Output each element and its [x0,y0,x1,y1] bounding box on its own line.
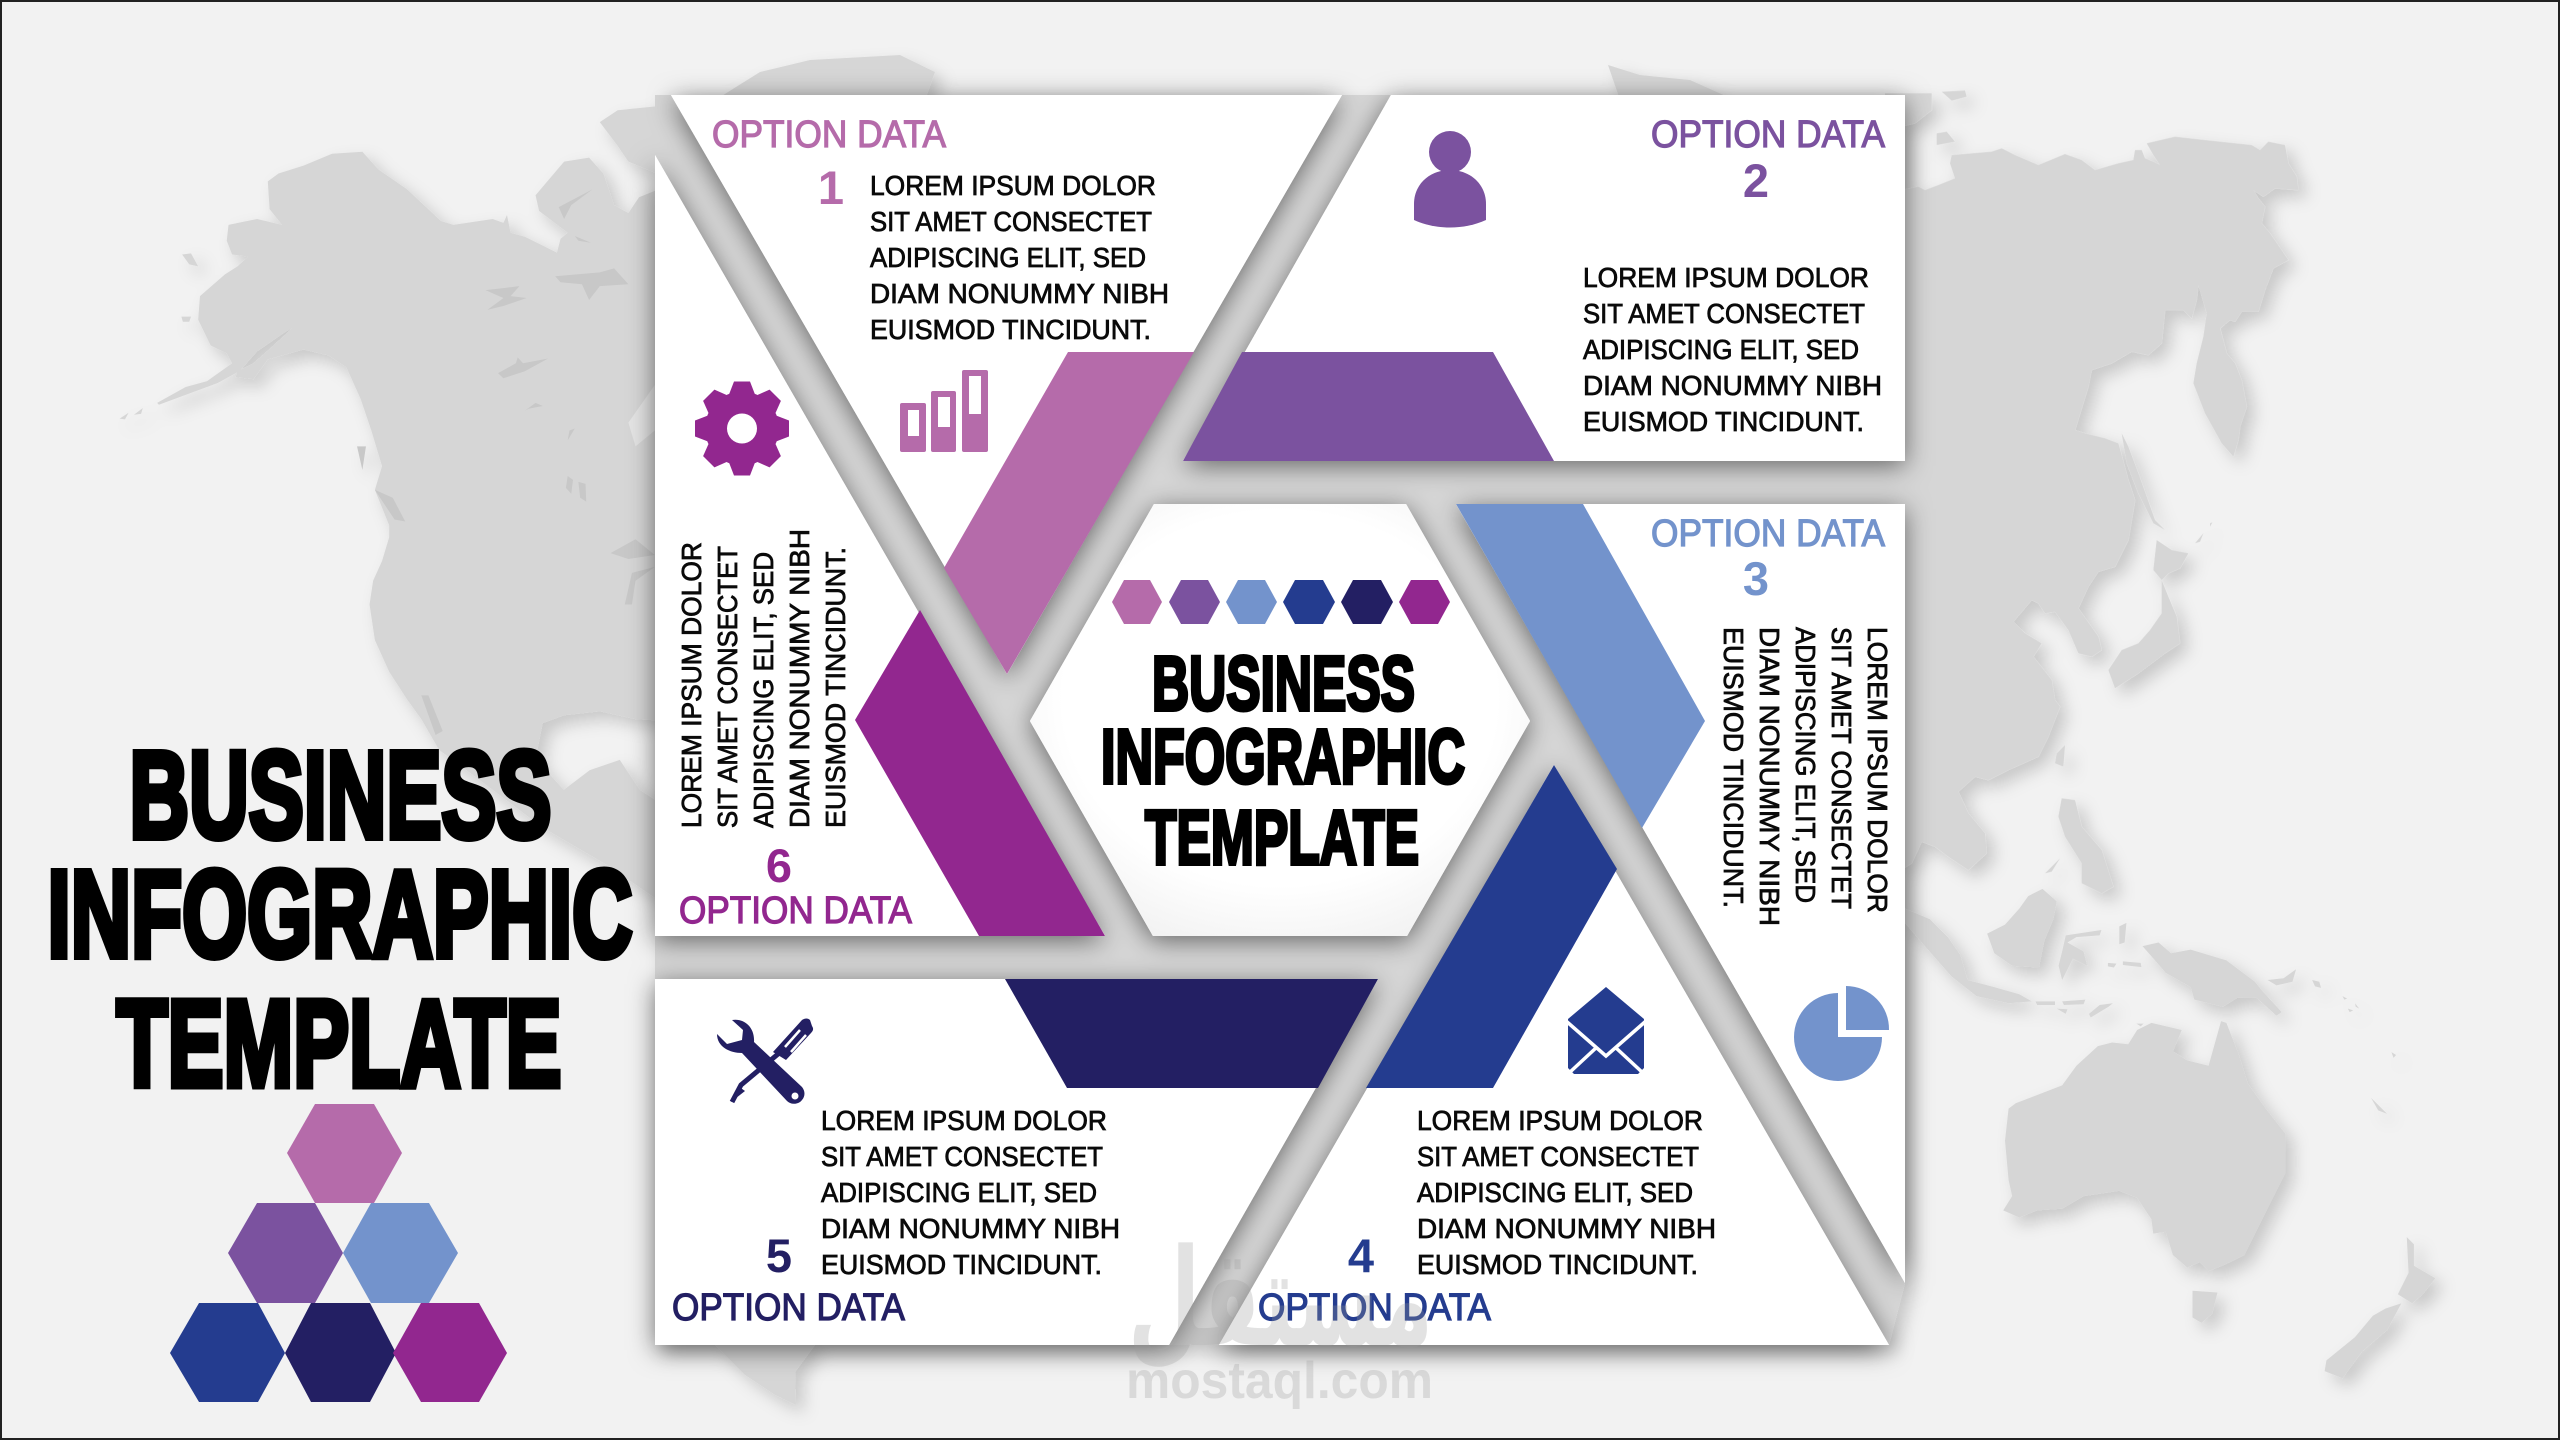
text 4: LOREM IPSUM DOLOR [1417,1105,1703,1136]
icon: tools [717,1018,813,1104]
text 6: ADIPISCING ELIT, SED [748,552,779,828]
icon: envelope [1566,987,1646,1074]
text 6: SIT AMET CONSECTET [712,546,743,828]
heading 2: OPTION DATA [1651,114,1886,156]
ribbon 5 [1005,979,1378,1088]
text 3 [1718,627,1893,926]
text 2: SIT AMET CONSECTET [1583,298,1865,329]
text 4: EUISMOD TINCIDUNT. [1417,1249,1698,1280]
watermark: مستقل [1128,1220,1433,1377]
ribbon 3 [1456,504,1705,828]
number 5: 5 [766,1229,792,1282]
text 3: ADIPISCING ELIT, SED [1790,627,1821,903]
small hexagon row [1112,580,1450,624]
text 5 [821,1105,1120,1280]
map: Asia [1885,91,2298,893]
center hexagon [1030,504,1530,936]
text 4: DIAM NONUMMY NIBH [1417,1213,1716,1244]
text 5: ADIPISCING ELIT, SED [821,1177,1097,1208]
heading 6: OPTION DATA [679,890,913,932]
left title: INFOGRAPHIC [48,846,632,984]
text 5: LOREM IPSUM DOLOR [821,1105,1107,1136]
text 5: EUISMOD TINCIDUNT. [821,1249,1102,1280]
icon: gear [695,382,789,476]
text 2: DIAM NONUMMY NIBH [1583,370,1882,401]
panel 4 [1219,765,1889,1345]
center title: BUSINESS [1152,641,1415,727]
text 2: EUISMOD TINCIDUNT. [1583,406,1864,437]
panel 3 [1456,504,1905,1283]
text 3: LOREM IPSUM DOLOR [1862,627,1893,913]
panel 6 [655,155,1105,936]
map: Indonesia and Papua [1905,889,2396,1114]
text 2: LOREM IPSUM DOLOR [1583,262,1869,293]
left title: TEMPLATE [116,976,562,1113]
number 2: 2 [1743,154,1769,207]
map: Greenland, Europe and central land [655,55,1905,1405]
text 1: LOREM IPSUM DOLOR [870,170,1156,201]
text 6: LOREM IPSUM DOLOR [676,542,707,828]
text 5: DIAM NONUMMY NIBH [821,1213,1120,1244]
text 2: ADIPISCING ELIT, SED [1583,334,1859,365]
ribbon 2 [1183,352,1554,461]
text 4: ADIPISCING ELIT, SED [1417,1177,1693,1208]
heading 4: OPTION DATA [1258,1287,1492,1329]
heading 3: OPTION DATA [1651,513,1886,555]
text 2 [1583,262,1882,437]
text 6: DIAM NONUMMY NIBH [784,529,815,828]
panel 2 [1183,95,1905,461]
icon: bar chart [900,370,988,452]
text 1: ADIPISCING ELIT, SED [870,242,1146,273]
text 3: EUISMOD TINCIDUNT. [1718,627,1749,908]
number 6: 6 [766,839,792,892]
text 6: EUISMOD TINCIDUNT. [820,547,851,828]
center title [1101,641,1465,881]
text 4 [1417,1105,1716,1280]
text 3: DIAM NONUMMY NIBH [1754,627,1785,926]
map: Australia and New Zealand [2003,1021,2435,1378]
ribbon 4 [1366,765,1617,1088]
number 3: 3 [1743,552,1769,605]
number 1: 1 [818,161,844,214]
icon: person [1414,131,1486,228]
watermark: mostaql.com [1126,1352,1433,1410]
text 1: SIT AMET CONSECTET [870,206,1152,237]
hexagon pyramid [170,1104,507,1402]
panel 1 [671,95,1342,674]
left title: BUSINESS [130,728,552,864]
text 6 [676,529,851,828]
heading 1: OPTION DATA [712,114,947,156]
number 4: 4 [1348,1229,1374,1282]
text 1: DIAM NONUMMY NIBH [870,278,1169,309]
left title [48,728,632,1113]
ribbon 6 [855,610,1105,936]
map: North America [120,106,707,930]
text 4: SIT AMET CONSECTET [1417,1141,1699,1172]
text 1 [870,170,1169,345]
text 3: SIT AMET CONSECTET [1826,627,1857,909]
watermark [1126,1220,1433,1410]
panel shadows [655,95,1905,1345]
ribbon 1 [944,352,1194,674]
text 1: EUISMOD TINCIDUNT. [870,314,1151,345]
text 5: SIT AMET CONSECTET [821,1141,1103,1172]
icon: pie chart [1794,986,1889,1081]
center title: INFOGRAPHIC [1101,714,1465,800]
panel 5 [655,979,1378,1345]
heading 5: OPTION DATA [672,1287,906,1329]
center title: TEMPLATE [1145,795,1419,881]
